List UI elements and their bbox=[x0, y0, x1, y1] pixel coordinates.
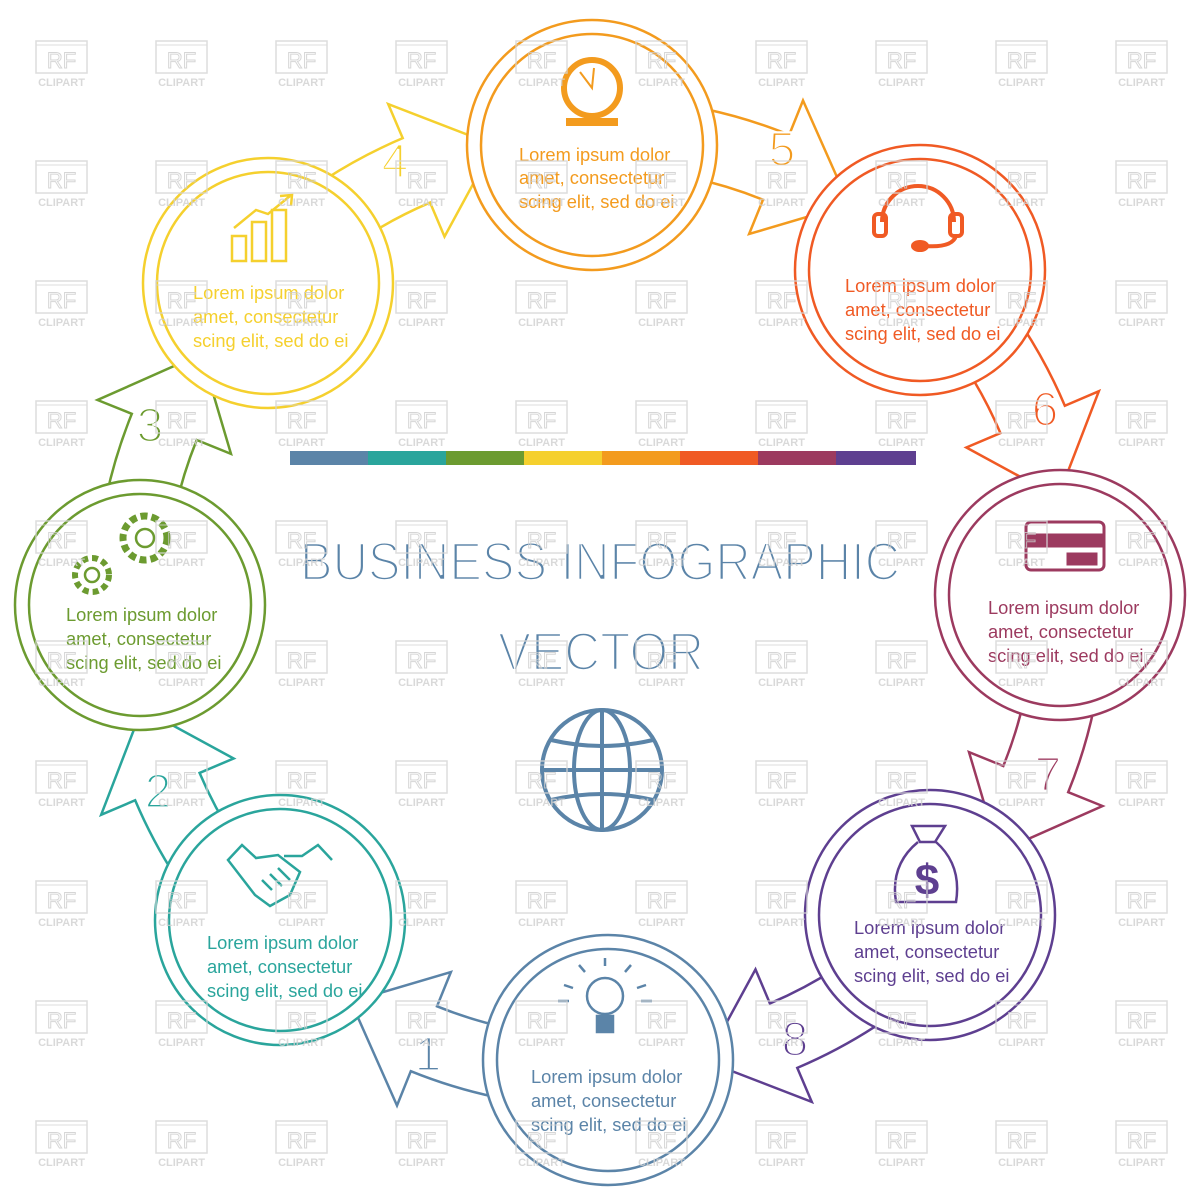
text 2: amet, consectetur bbox=[207, 956, 352, 977]
text 4: amet, consectetur bbox=[193, 306, 338, 327]
arrow 3 bbox=[98, 354, 231, 513]
step 6 circle bbox=[795, 145, 1045, 395]
arrow numbers bbox=[137, 124, 1061, 1082]
step 5 circle bbox=[467, 20, 717, 270]
text 6: scing elit, sed do ei bbox=[845, 323, 1000, 344]
arrow 8 bbox=[685, 928, 891, 1134]
step 7 circle bbox=[935, 470, 1185, 720]
title: BUSINESS INFOGRAPHIC bbox=[300, 532, 900, 592]
text 3: Lorem ipsum dolor bbox=[66, 604, 217, 625]
icon: gears bbox=[75, 516, 167, 592]
step 4 circle bbox=[143, 158, 393, 408]
text 7: Lorem ipsum dolor bbox=[988, 597, 1139, 618]
text 8: scing elit, sed do ei bbox=[854, 965, 1009, 986]
text 3: amet, consectetur bbox=[66, 628, 211, 649]
icon: money bag bbox=[895, 826, 957, 905]
icon: light bulb bbox=[558, 958, 652, 1032]
text 7: amet, consectetur bbox=[988, 621, 1133, 642]
step 3 circle bbox=[15, 480, 265, 730]
arrow numbers: 8 bbox=[782, 1014, 808, 1066]
arrow 5 bbox=[690, 100, 849, 234]
subtitle: VECTOR bbox=[498, 622, 704, 682]
arrow 1 bbox=[351, 972, 510, 1106]
text 8: amet, consectetur bbox=[854, 941, 999, 962]
icon: handshake bbox=[228, 845, 332, 906]
icon: bar chart bbox=[232, 195, 292, 261]
text 2: Lorem ipsum dolor bbox=[207, 932, 358, 953]
arrow numbers: 2 bbox=[145, 766, 171, 818]
arrow 6 bbox=[925, 312, 1131, 518]
arrow numbers: 6 bbox=[1032, 384, 1058, 436]
arrow numbers: 1 bbox=[415, 1028, 441, 1082]
text 4: Lorem ipsum dolor bbox=[193, 282, 344, 303]
arrow numbers: 3 bbox=[137, 400, 163, 452]
arrow numbers: 7 bbox=[1035, 748, 1061, 802]
text 5: amet, consectetur bbox=[519, 167, 664, 188]
text 1: scing elit, sed do ei bbox=[531, 1114, 686, 1135]
arrow numbers: 5 bbox=[769, 124, 795, 176]
text 6: Lorem ipsum dolor bbox=[845, 275, 996, 296]
text 8: Lorem ipsum dolor bbox=[854, 917, 1005, 938]
arrow 7 bbox=[969, 693, 1102, 852]
icon: headset bbox=[874, 186, 962, 250]
icon: globe bbox=[542, 710, 662, 830]
icon: money bag: $ bbox=[915, 856, 939, 905]
step 8 circle bbox=[805, 790, 1055, 1040]
icon: credit card bbox=[1026, 522, 1104, 570]
step 1 circle bbox=[483, 935, 733, 1185]
text 6: amet, consectetur bbox=[845, 299, 990, 320]
arrow 4 bbox=[309, 72, 515, 278]
text 5: scing elit, sed do ei bbox=[519, 191, 674, 212]
icon: clock bbox=[564, 60, 620, 126]
text 3: scing elit, sed do ei bbox=[66, 652, 221, 673]
step 2 circle bbox=[155, 795, 405, 1045]
text 2: scing elit, sed do ei bbox=[207, 980, 362, 1001]
text 7: scing elit, sed do ei bbox=[988, 645, 1143, 666]
text 4: scing elit, sed do ei bbox=[193, 330, 348, 351]
text 1: Lorem ipsum dolor bbox=[531, 1066, 682, 1087]
text 1: amet, consectetur bbox=[531, 1090, 676, 1111]
arrow 2 bbox=[69, 688, 275, 894]
arrow numbers: 4 bbox=[382, 136, 408, 188]
color bar bbox=[290, 451, 916, 465]
text 5: Lorem ipsum dolor bbox=[519, 144, 670, 165]
